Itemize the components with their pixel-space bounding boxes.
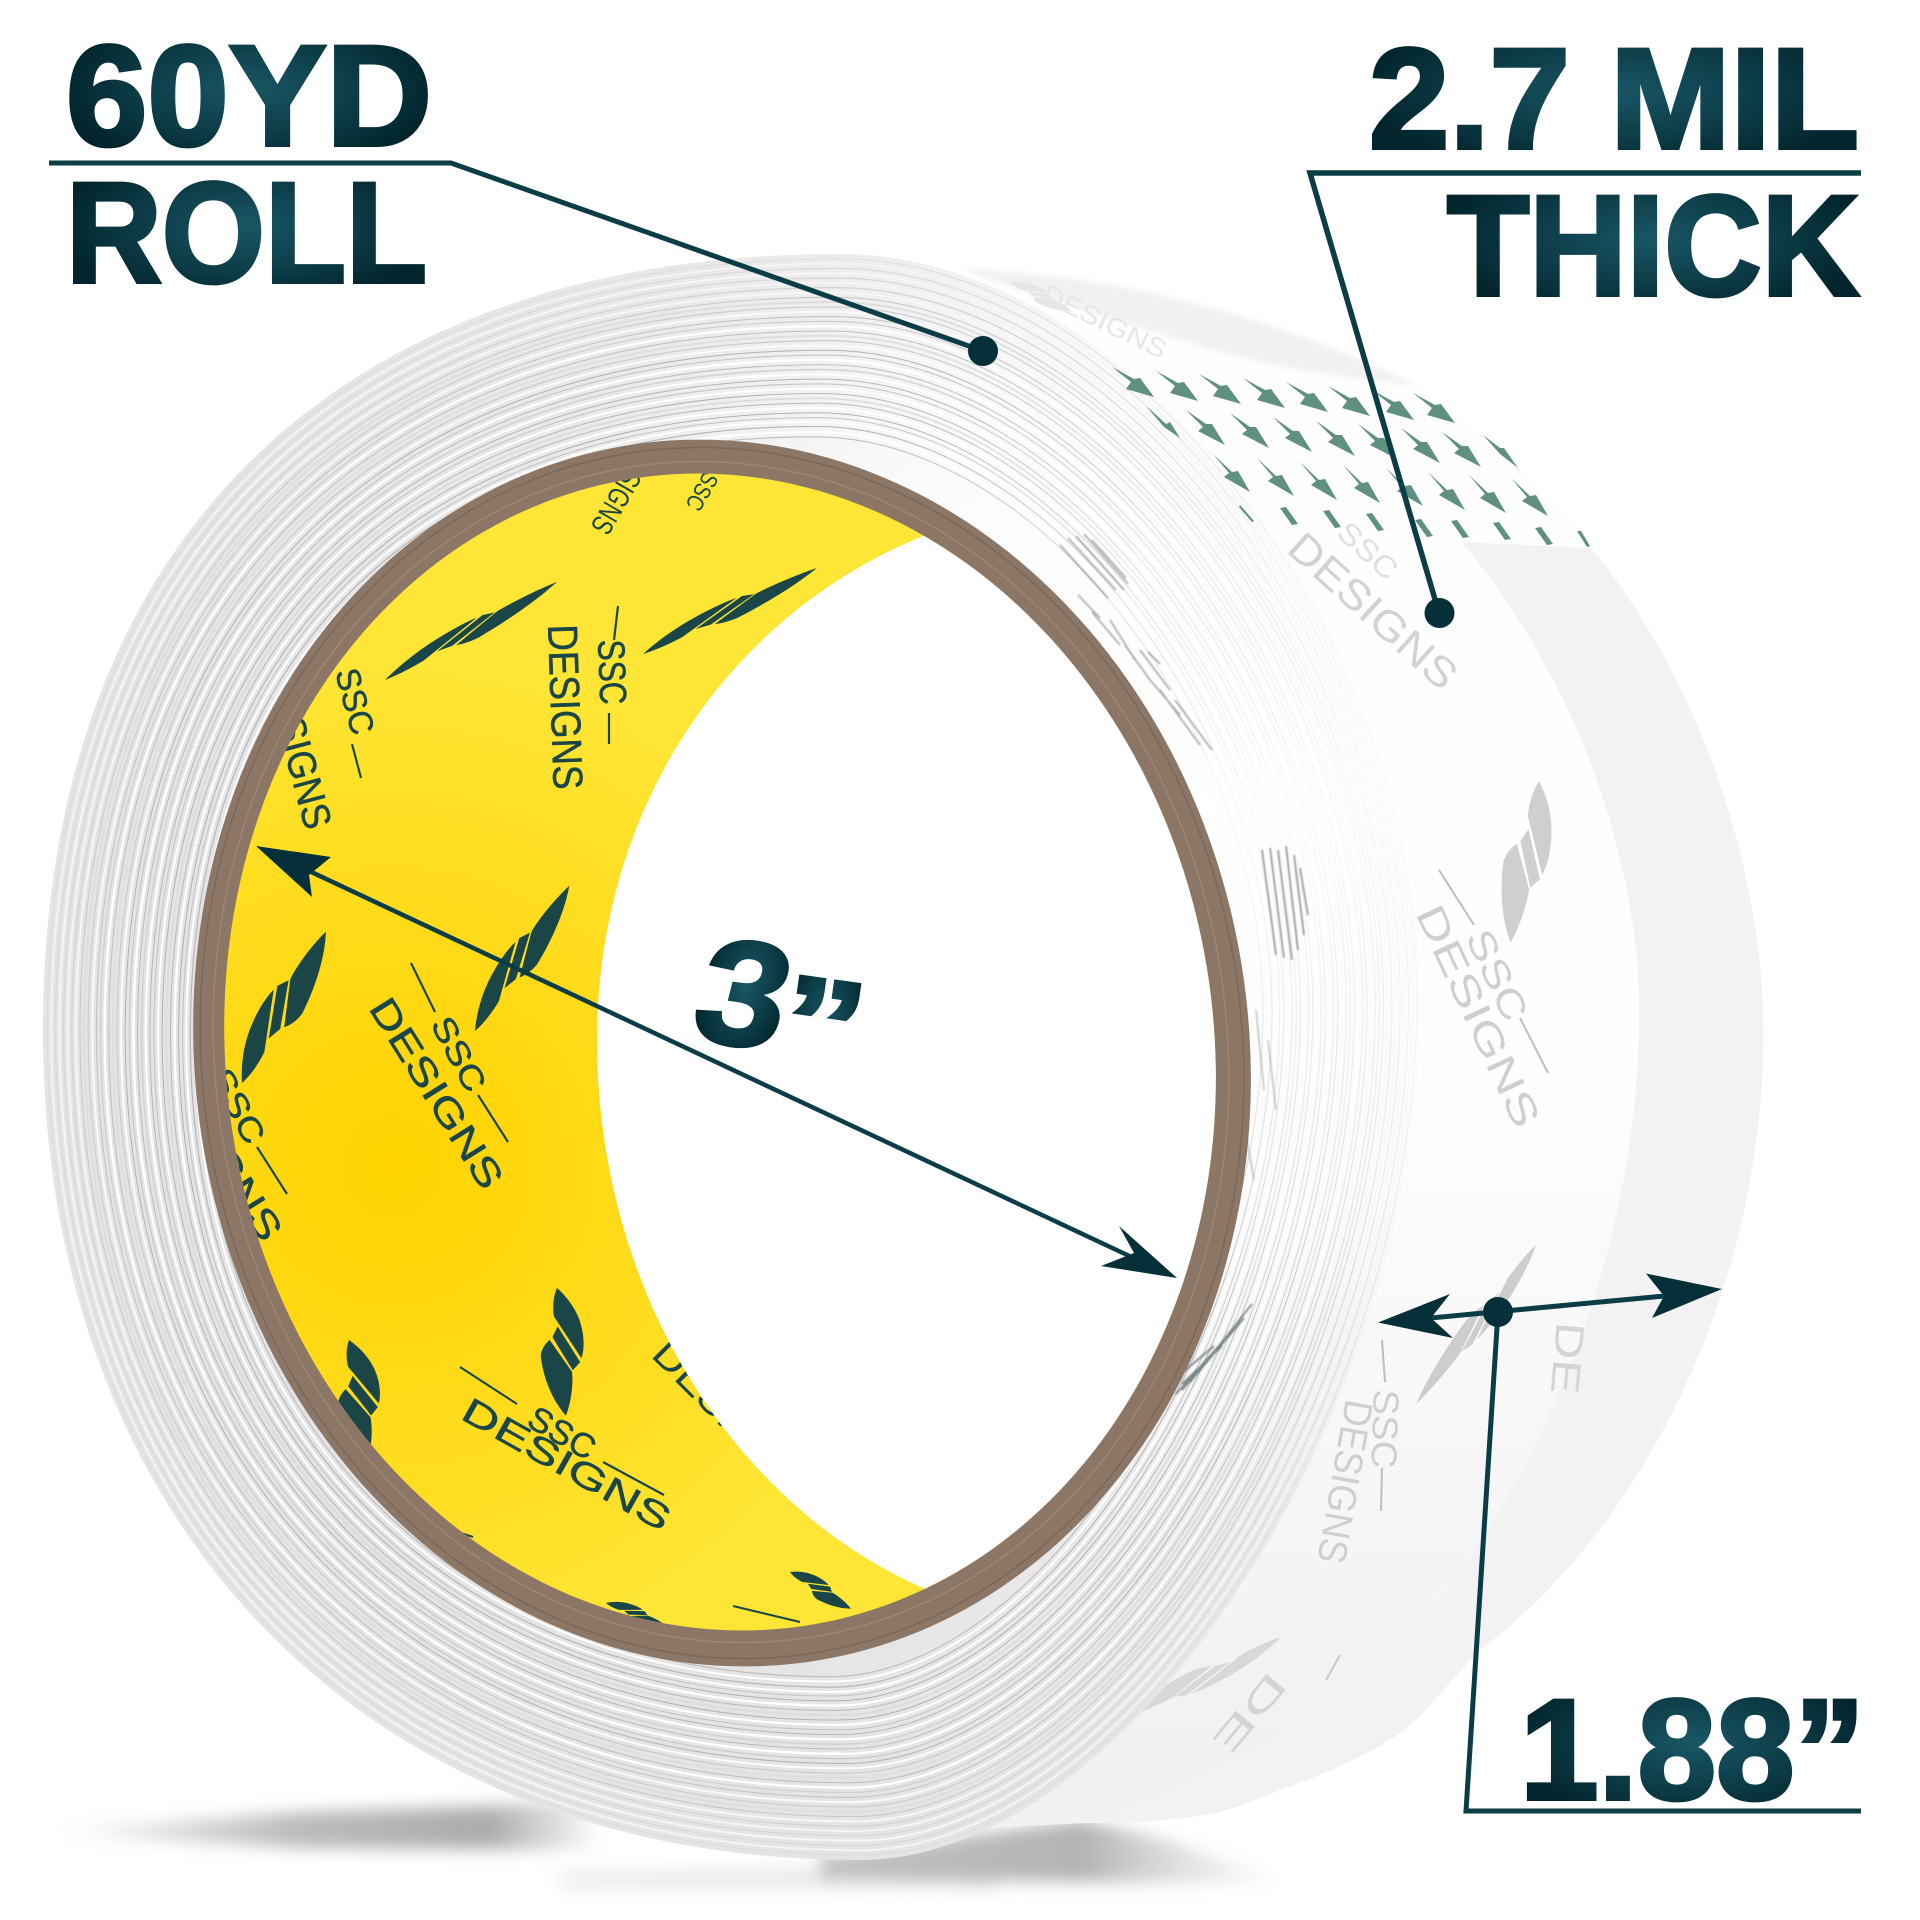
logo text bottom: DESIGNS (455, 1389, 678, 1539)
core ring inner lines (138, 395, 1304, 1709)
callout dot (968, 336, 998, 366)
3 inch core diameter arrow (256, 846, 1177, 1278)
grey print: leaf at width arrow (1408, 1239, 1545, 1411)
callout line: 2.7 mil thick (1310, 173, 1861, 628)
callout line: 60YD roll (49, 163, 998, 366)
logo leaf 8 (606, 1602, 663, 1624)
tape roll front face (43, 254, 1421, 1860)
repeating logo print (139, 436, 856, 1634)
yellow surface (150, 409, 1290, 1695)
arrow shaft (290, 862, 1140, 1261)
side crescent band (1084, 542, 1763, 1823)
see-through hole (597, 536, 1216, 1589)
grey print: SSC Designs lower: DESIGNS (1308, 1396, 1380, 1567)
grey print: SSC Designs near thickness dot: SSC (1330, 516, 1404, 587)
label: 3 inch (679, 906, 876, 1102)
logo text top edge: SSC (680, 467, 723, 515)
yellow core interior with print (224, 474, 1216, 1630)
grey print: SSC Designs lower (1308, 1340, 1407, 1567)
grey print: SSC Designs near thickness dot: DESIGNS (1279, 523, 1467, 699)
face fill (43, 254, 1421, 1860)
print smear along core (1078, 595, 1212, 750)
logo text centre: DESIGNS (360, 991, 511, 1197)
heading: 2.7 MIL: 2.7 MIL (1369, 20, 1859, 179)
heading: THICK: THICK (1447, 167, 1859, 326)
logo text upper left clipped: DESIGNS (254, 663, 340, 834)
logo text bottom: SSC (521, 1399, 602, 1468)
heading: 1.88 inch: 1.88” (1520, 1671, 1865, 1830)
arrows row 3 (1213, 454, 1548, 516)
grey print: SSC Designs right: SSC (1457, 923, 1535, 1028)
callout line: 1.88 inch width (1466, 1297, 1861, 1811)
grey print: top fading logo: DESIGNS (1037, 278, 1172, 365)
logo text top edge: DESIGNS (584, 436, 663, 540)
top side band (960, 269, 1417, 385)
logo text centre: SSC (424, 1010, 494, 1098)
grey print: SSC Designs right (1407, 777, 1561, 1134)
grey print: SSC Designs lower: SSC (1363, 1389, 1407, 1469)
logo text upper left clipped: SSC (327, 664, 381, 739)
print smear right upper (1262, 846, 1308, 960)
printed arrows pattern (1112, 367, 1590, 547)
logo text top: DESIGNS (539, 624, 592, 790)
ground shadow left (61, 1800, 620, 1850)
logo text partial right: DESIGNS (644, 1331, 816, 1504)
logo leaf 5 (540, 1288, 584, 1416)
width arrow (1378, 1274, 1722, 1338)
ground shadow right (820, 1820, 1295, 1884)
callout dot (1424, 598, 1454, 628)
logo text bottom (460, 1366, 670, 1528)
core ring layer lines (123, 380, 1321, 1726)
logo text left clipped: SSC (203, 1062, 273, 1150)
logo text top (548, 606, 627, 788)
side base (700, 269, 1763, 1830)
logo text centre (370, 962, 509, 1188)
label: 3 inch: 3 (679, 906, 809, 1082)
grey print: leaf bottom (1109, 1628, 1286, 1733)
print smear lower (1176, 1304, 1252, 1394)
wound layer lines (47, 259, 1417, 1855)
heading: 60YD: 60YD (66, 17, 432, 176)
heading: ROLL: ROLL (66, 154, 427, 313)
logo leaf 6 (338, 1340, 380, 1444)
arrow shaft (1420, 1295, 1675, 1319)
logo leaf 2 (643, 568, 817, 654)
print smear upper (1060, 534, 1128, 598)
callout dot (1483, 1297, 1513, 1327)
logo text top edge (592, 474, 718, 534)
logo text left clipped: DESIGNS (139, 1043, 290, 1249)
brown cardboard core (115, 371, 1329, 1735)
logo leaf 4 (242, 932, 326, 1083)
tape roll side surface (700, 269, 1763, 1830)
arrows row 2 (1146, 406, 1518, 468)
logo text left clipped (226, 1070, 288, 1240)
left arrowhead (256, 846, 331, 897)
logo text upper left clipped (285, 669, 374, 828)
left arrowhead (1378, 1294, 1453, 1338)
logo leaf 3 (475, 886, 570, 1031)
logo text top: SSC (589, 639, 633, 705)
see-through print marks on face (1060, 534, 1308, 1394)
logo line bottom edge (462, 1532, 800, 1623)
core ring (115, 371, 1329, 1735)
arrows row 1 (1112, 367, 1455, 423)
arrows row 4 (1239, 505, 1590, 547)
right arrowhead (1101, 1226, 1177, 1278)
grey print: partial DE right: DE (1542, 1320, 1592, 1396)
print smear right (1240, 990, 1276, 1180)
grey print: partial DE bottom: DE (1205, 1665, 1295, 1762)
label: 3 inch: ” (772, 946, 876, 1102)
ground shadow faint band (560, 1866, 1000, 1890)
grey print: top fading logo (1006, 275, 1172, 365)
right arrowhead (1646, 1274, 1722, 1318)
logo leaf 7 (790, 1572, 851, 1609)
logo leaf 1 (385, 582, 557, 680)
grey print: SSC Designs right: DESIGNS (1407, 898, 1548, 1134)
